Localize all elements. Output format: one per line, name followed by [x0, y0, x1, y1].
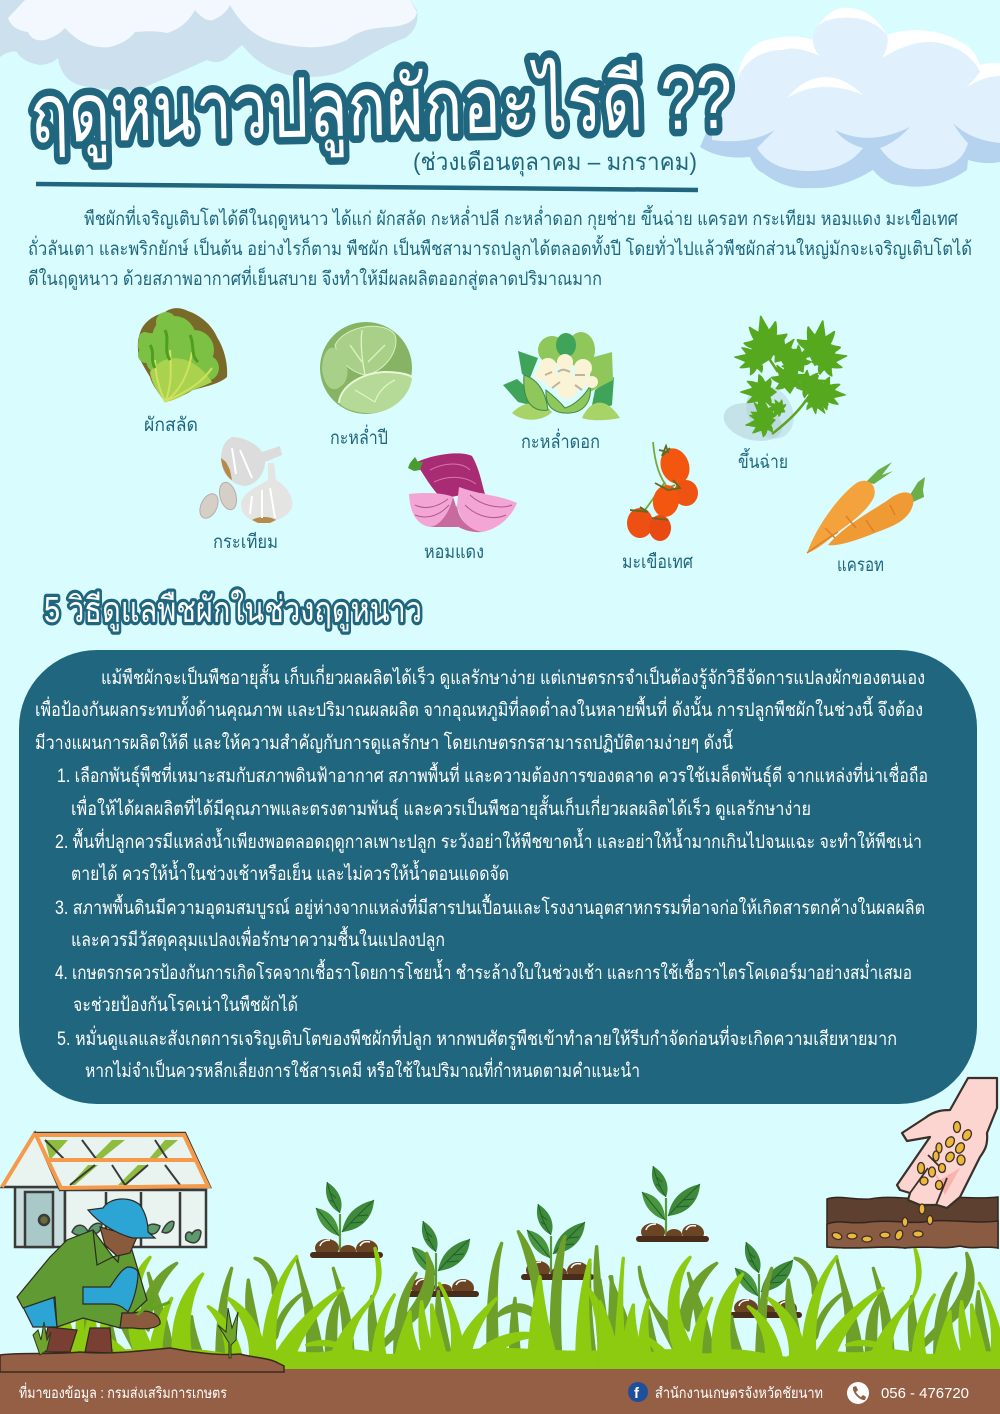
icon: celery [719, 312, 850, 447]
icon: carrots [807, 462, 925, 553]
cloud: top left [0, 0, 418, 91]
label: lettuce: ผักสลัด [144, 415, 198, 436]
footer: source: ที่มาของข้อมูล : กรมส่งเสริมการเกษตร [19, 1382, 227, 1402]
icon: garlic [196, 437, 292, 523]
soil mound [0, 1348, 284, 1372]
icon: seedlings [310, 1166, 802, 1318]
icon: cauliflower [503, 332, 620, 420]
tip 2: ตายได้ ควรให้น้ำในช่วงเช้าหรือเย็น และไม่ควรให้น้ำตอนแดดจัด [71, 860, 509, 885]
tip 4: จะช่วยป้องกันโรคเน่าในพืชผักได้ [73, 993, 298, 1016]
cloud: top right [700, 8, 1000, 188]
icon: hand with seeds and soil [827, 1078, 998, 1248]
label: shallot: หอมแดง [424, 542, 484, 563]
panel: care tips [19, 650, 977, 1104]
tip 2 [55, 828, 922, 885]
subtitle: (ช่วงเดือนตุลาคม – มกราคม) [413, 149, 697, 177]
tip 3: และควรมีวัสดุคลุมแปลงเพื่อรักษาความชื้นในแปลงปลูก [71, 926, 445, 952]
icon: facebook: f [634, 1385, 640, 1402]
tip 4 [55, 959, 912, 1016]
ground [0, 1369, 1000, 1414]
label: tomatoes: มะเขือเทศ [622, 552, 693, 573]
panel text: introduction: มีวางแผนการผลิตให้ดี และให้ความสำคัญกับการดูแลรักษา โดยเกษตรกรสามารถปฏิบัติตามง่ายๆ ดังนี้ [35, 729, 733, 754]
title underline [36, 184, 698, 190]
icon: lettuce [138, 308, 227, 402]
sprouts near farmer [33, 1308, 238, 1358]
icon: phone [847, 1382, 869, 1404]
label: garlic: กระเทียม [213, 531, 278, 553]
icon: facebook [628, 1382, 648, 1402]
icon: tomatoes [627, 442, 698, 541]
panel text: introduction [35, 664, 925, 754]
tip 5 [57, 1025, 897, 1082]
icon: cabbage [320, 322, 412, 414]
tip 5: หากไม่จำเป็นควรหลีกเลี่ยงการใช้สารเคมี หรือใช้ในปริมาณที่กำหนดตามคำแนะนำ [85, 1057, 640, 1082]
label: carrots: แครอท [837, 555, 884, 576]
label: celery: ขึ้นฉ่าย [738, 448, 788, 473]
section heading: 5 วิธีดูแลพืชผักในช่วงฤดูหนาว [44, 589, 422, 632]
intro paragraph [28, 205, 972, 290]
tip 1 [57, 762, 928, 821]
icon: greenhouse [2, 1133, 210, 1247]
intro paragraph: ดีในฤดูหนาว ด้วยสภาพอากาศที่เย็นสบาย จึงทำให้มีผลผลิตออกสู่ตลาดปริมาณมาก [28, 265, 602, 290]
tip 1: เพื่อให้ได้ผลผลิตที่ได้มีคุณภาพและตรงตามพันธุ์ และควรเป็นพืชอายุสั้นเก็บเกี่ยวผลผลิตได้เร็ว ดูแลรักษาง่าย [71, 795, 811, 821]
label: cauliflower: กะหล่ำดอก [521, 428, 600, 453]
label: cabbage: กะหล่ำปี [330, 424, 388, 449]
icon: farmer [17, 1199, 170, 1353]
title: ฤดูหนาวปลูกผักอะไรดี ?? [29, 55, 733, 163]
footer: office name: สำนักงานเกษตรจังหวัดชัยนาท [655, 1385, 823, 1402]
tip 3 [55, 894, 925, 952]
icon: shallot [408, 453, 517, 532]
footer: phone number: 056 - 476720 [881, 1385, 969, 1402]
grass [60, 1232, 1000, 1370]
